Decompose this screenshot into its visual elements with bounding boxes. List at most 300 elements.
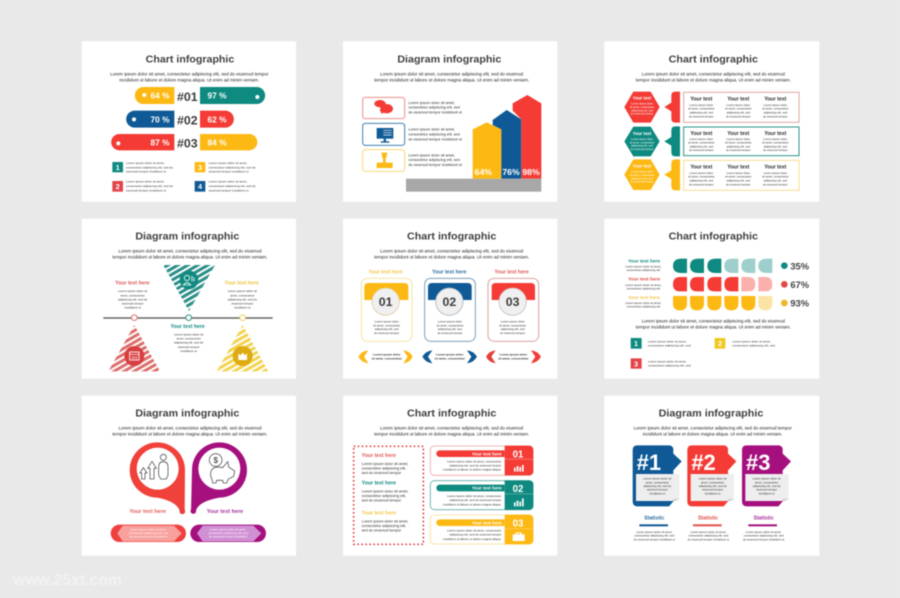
list item red [362,453,408,475]
title: Diagram infographic [659,409,764,420]
red pill [111,525,186,542]
list item yellow: sed do eiusmod tempor [362,529,402,533]
legend 1: consectetur adipiscing elit, sed. [648,343,692,347]
hexagon red: Your text [633,96,652,101]
legend 3: Lorem ipsum dolor sit amet, [648,360,687,364]
card 03: adipiscing elit, sed [501,327,525,331]
table yellow: adipiscing elit, sed [690,178,713,182]
table red: do eiusmod tempor [726,114,751,118]
label teal: amet, consectetur [177,337,201,341]
hexagon red: sit amet, consectetur [630,105,654,109]
table teal: Lorem ipsum dolor [726,137,750,141]
table red: adipiscing elit, sed [690,110,713,114]
label red: eiusmod tempor [122,301,144,305]
slide 6: pictogram percentages [604,219,819,379]
slide 4: striped triangles timeline [82,219,296,379]
legend 1: consectetur adipiscing elit, sed do [126,165,173,169]
intro text: incididunt ut labore et dolore magna aliqua. Ut enim ad minim veniam. [119,77,259,82]
teal row 35% [673,259,810,273]
legend 3: Lorem ipsum dolor sit amet, [209,161,247,165]
purple pin with piggy bank icon: $ [213,456,218,465]
legend 3: consectetur adipiscing elit, sed. [648,364,692,368]
legend 2 [715,338,776,349]
statistic 1: do eiusmod tempor incididunt ut [634,537,675,541]
hexagon teal: do eiusmod tempor [631,147,653,151]
rank 03: #03 [177,136,198,150]
table teal: adipiscing elit, sed [727,144,750,148]
pill 87% [111,134,174,150]
legend 3 [195,161,256,174]
statistic 2: Lorem ipsum dolor sit amet, [690,530,727,534]
chevrons and caption 3: sit amet, consectetur [498,357,529,361]
row label red [625,277,662,291]
teal inverted triangle with people icon [163,265,215,311]
purple pill: do eiusmod tempor incididunt [209,535,247,539]
pill 97% [200,87,265,104]
yellow row 93% [673,296,810,310]
tag 1 [633,445,682,506]
table teal: sit amet, consectetur [725,141,752,145]
legend 3 [631,358,692,369]
card 03: Lorem ipsum dolor [501,320,525,324]
list item red: Your text here [362,453,396,459]
list item yellow [362,511,408,533]
text 3: consectetur adipiscing elit, sed [408,158,460,162]
arrow bar 76%: 76% [502,167,520,177]
red pill: do eiusmod tempor incididunt [129,535,168,539]
list item teal: sed do eiusmod tempor [362,498,402,502]
row 02: incididunt ut labore et dolore magna aliqua. [443,502,501,506]
title: Chart infographic [146,54,235,65]
title: Chart infographic [669,232,758,243]
table teal: Your text [764,131,787,137]
legend 2: 2 [116,182,120,191]
row label red: Lorem ipsum dolor sit amet, [625,283,662,287]
hexagon yellow: sit amet, consectetur [630,173,654,177]
text 1: consectetur adipiscing elit, sed [408,106,460,110]
table yellow: Lorem ipsum dolor [689,171,713,175]
table teal: sit amet, consectetur [762,141,789,145]
intro text: tempor incididunt ut labore et dolore magna aliqua. Ut enim ad minim veniam. [374,254,529,259]
slide 9: statistic tags [604,396,819,556]
table teal: do eiusmod tempor [763,148,788,152]
list item teal: Lorem ipsum dolor sit amet, [362,489,408,493]
intro text: tempor incididunt ut labore et dolore magna aliqua. Ut enim ad minim veniam. [112,254,268,259]
label purple: Your text here [207,509,243,515]
list item red: sed do eiusmod tempor [362,471,402,475]
tag 3: incididunt ut [759,491,775,495]
intro text: Lorem ipsum dolor sit amet, consectetur adipiscing elit, sed do eiusmod [642,72,785,77]
purple pill: Lorem ipsum dolor sit amet, [210,527,246,531]
table teal: adipiscing elit, sed [690,144,713,148]
red row 67%: 67% [790,280,810,290]
hexagon yellow: Lorem ipsum dolor [631,170,653,174]
pill 84% [200,134,257,150]
hexagon yellow [624,159,660,190]
table yellow: Lorem ipsum dolor [726,171,750,175]
tag 2 [687,445,736,506]
red pill: consectetur adipiscing elit, sed [128,531,169,535]
tag 2: incididunt ut [705,491,721,495]
bracket yellow [664,159,680,190]
chevrons and caption 1: sit amet, consectetur [371,357,403,361]
chevrons and caption 2 [422,350,477,363]
label teal: incididunt ut [181,349,197,353]
hexagon yellow: Your text [633,164,652,169]
intro text: Lorem ipsum dolor sit amet, consectetur adipiscing elit, sed do eiusmod [380,72,524,77]
table red: do eiusmod tempor [689,114,714,118]
card 02: do eiusmod tempor [437,331,463,335]
table yellow: do eiusmod tempor [726,182,751,186]
card 02: 02 [442,295,456,309]
card 01: 01 [379,295,393,309]
title: Chart infographic [669,54,758,65]
yellow row 93%: 93% [790,299,810,309]
legend 4: eiusmod tempor incididunt ut [209,188,249,192]
intro text: tempor incididunt ut labore et dolore magna aliqua. Ut enim ad minim veniam. [374,77,529,82]
legend 2: eiusmod tempor incididunt ut [126,188,166,192]
row label yellow: consectetur adipiscing elit [627,305,660,309]
intro text: incididunt ut labore et dolore magna aliqua. Ut enim ad minim veniam. [643,431,783,436]
legend 1: Lorem ipsum dolor sit amet, [126,161,165,165]
row 01: Your text here [472,451,502,456]
tag 3: eiusmod tempor [756,488,777,492]
tag 2: #2 [691,450,716,475]
base bar [406,179,541,192]
text 2: Lorem ipsum dolor sit amet, [408,128,455,132]
tag 2: Lorem ipsum dolor sit [699,477,727,481]
label teal: adipiscing elit, sed do [174,341,204,345]
red pin with growth icon [130,442,185,514]
tag 1: #1 [637,450,661,475]
row 01: incididunt ut labore et dolore magna aliqua. [443,468,501,472]
list item teal [362,481,408,502]
legend 1: Lorem ipsum dolor sit amet, [648,339,687,343]
title: Diagram infographic [397,54,502,65]
card 02: Your text here [432,269,467,275]
card 01 [361,269,412,341]
arrow bar 76% [493,110,521,179]
row label teal: Your text here [628,258,660,264]
list item yellow: Lorem ipsum dolor sit amet, [362,520,408,524]
slide 7: map pins [82,396,296,556]
pill 97%: 97 % [208,91,227,101]
statistic 3: Lorem ipsum dolor sit amet, [746,530,782,534]
table yellow: do eiusmod tempor [689,182,714,186]
legend 1: 1 [634,339,638,348]
rank 01: #01 [177,90,198,104]
bracket red [664,92,680,123]
legend 2: consectetur adipiscing elit, sed. [732,343,776,347]
legend 1 [631,338,692,349]
intro text: tempor incididunt ut labore et dolore magna aliqua. Ut enim ad minim veniam. [112,431,268,436]
table yellow: adipiscing elit, sed [727,178,750,182]
card 01: do eiusmod tempor [374,331,399,335]
label teal: eiusmod tempor [178,345,200,349]
table teal: Your text [727,131,750,137]
statistic 2: consectetur adipiscing elit, sed [688,534,729,538]
arrow bar 64%: 64% [475,167,492,177]
statistic 1: consectetur adipiscing elit, sed [634,534,675,538]
statistic 3: Statistic [754,515,774,521]
card 03: do eiusmod tempor [500,331,525,335]
label yellow: amet, consectetur [230,293,254,297]
table red: Lorem ipsum dolor [763,103,787,107]
purple pin with piggy bank icon [190,442,247,514]
row 03: 03 [513,519,524,530]
row label yellow [625,295,662,309]
list item teal: consectetur adipiscing elit, [362,494,406,498]
statistic 3 [743,515,785,541]
statistic 2: Statistic [698,515,718,521]
list item teal: Your text here [362,481,396,487]
body text: tempor incididunt ut labore et dolore magna aliqua. Ut enim ad minim veniam. [636,324,791,329]
row 01: adipiscing elit, sed do eiusmod tempor [450,463,501,467]
statistic 2: do eiusmod tempor incididunt ut [688,537,729,541]
hexagon teal: Your text [633,131,652,136]
intro text: tempor incididunt ut labore et dolore magna aliqua. Ut enim ad minim veniam. [636,77,791,82]
slide 1: chart with pills [82,41,296,202]
intro text: Lorem ipsum dolor sit amet, consectetur adipiscing elit, sed do eiusmod tempor [633,426,792,431]
legend 2 [112,180,173,192]
list item red: Lorem ipsum dolor sit amet, [362,462,408,466]
row 03: Your text here [472,520,502,525]
card 03 [488,269,539,341]
table teal: Lorem ipsum dolor [689,137,713,141]
watermark: www.25xt.com [12,572,122,589]
row label teal [625,258,662,272]
slide 3: hexagons and tables [604,41,819,202]
label red: Lorem ipsum dolor sit [118,289,147,293]
title: Diagram infographic [135,409,240,420]
tag 2: eiusmod tempor [702,488,723,492]
purple pill: consectetur adipiscing elit, sed [208,531,248,535]
table red: adipiscing elit, sed [727,110,750,114]
label red: amet, consectetur [121,293,145,297]
tag 1: adipiscing elit, sed do [643,484,672,488]
tag 3: adipiscing elit, sed do [753,484,781,488]
tag 3: amet, consectetur [755,480,778,484]
yellow triangle with chart icon [217,325,268,371]
text 1: Lorem ipsum dolor sit amet, [408,101,455,105]
table teal: adipiscing elit, sed [764,144,787,148]
row 01 [430,446,533,475]
legend 2: 2 [718,339,722,348]
rank 02: #02 [177,113,198,127]
legend 3: consectetur adipiscing elit, sed do [209,165,256,169]
slide 8: dotted list and rows [343,396,557,556]
row 02: Lorem ipsum dolor sit amet, consectetur [447,494,501,498]
list item red: consectetur adipiscing elit, [362,466,406,470]
table teal: do eiusmod tempor [689,148,714,152]
intro text: Lorem ipsum dolor sit amet, consectetur adipiscing elit, sed do eiusmod [118,426,262,431]
label red: Your text here [115,280,150,286]
table red: adipiscing elit, sed [764,110,787,114]
hexagon yellow: adipiscing elit, sed [631,176,653,180]
label red: adipiscing elit, sed do [118,297,148,301]
table red [684,92,799,122]
pill 87%: 87 % [151,138,170,148]
table red: sit amet, consectetur [725,107,752,111]
table yellow: sit amet, consectetur [725,175,752,179]
chevrons and caption 3: Lorem ipsum dolor [500,353,528,357]
red triangle with calendar icon [108,325,160,371]
intro text: Lorem ipsum dolor sit amet, consectetur adipiscing elit, sed do eiusmod [380,426,524,431]
intro text: tempor incididunt ut labore et dolore magna aliqua. Ut enim ad minim veniam. [374,431,529,436]
card 01: sit amet, consectetur [373,323,400,327]
tag 1: eiusmod tempor [647,488,668,492]
body text: Lorem ipsum dolor sit amet, consectetur adipiscing elit, sed do eiusmod [642,319,785,324]
tag 2: adipiscing elit, sed do [699,484,727,488]
chevrons and caption 1: Lorem ipsum dolor [373,353,401,357]
card 02 [425,269,475,341]
card 02: adipiscing elit, sed [438,327,462,331]
statistic 1: Lorem ipsum dolor sit amet, [636,530,673,534]
statistic 3: consectetur adipiscing elit, sed [744,534,784,538]
row label yellow: Your text here [628,295,660,301]
tag 3: #3 [746,450,770,475]
title: Chart infographic [407,409,497,420]
intro text: Lorem ipsum dolor sit amet, consectetur adipiscing elit, sed do eiusmod tempor [110,72,269,77]
legend 1: 1 [116,163,120,172]
title: Diagram infographic [135,232,240,243]
legend 2: Lorem ipsum dolor sit amet, [732,339,771,343]
text 1: do eiusmod tempor incididunt ut [408,111,463,115]
table yellow [684,160,799,190]
row 02: Your text here [472,486,502,491]
row label yellow: Lorem ipsum dolor sit amet, [625,301,662,305]
row 01: 01 [513,449,524,460]
card 01: Your text here [369,269,403,275]
pill 70% [126,111,174,128]
legend 3: 3 [198,163,202,172]
row 02: 02 [513,484,523,495]
table yellow: Your text [690,165,713,171]
pill 64%: 64 % [151,91,170,101]
table red: sit amet, consectetur [688,107,715,111]
table teal [684,127,799,156]
label yellow: adipiscing elit, sed do [228,297,257,301]
label yellow: Lorem ipsum dolor sit [228,289,257,293]
pill 62% [200,111,234,128]
statistic 1 [634,515,675,541]
legend 3: 3 [634,359,638,368]
red row 67% [673,277,810,291]
label yellow: Your text here [225,280,259,286]
legend 4: Lorem ipsum dolor sit amet, [209,180,247,184]
pill 64% [135,87,174,104]
legend 4: 4 [198,182,203,191]
table yellow: Your text [764,165,787,171]
row label teal: Lorem ipsum dolor sit amet, [625,264,662,268]
table red: Your text [764,97,787,103]
row label red: Your text here [628,277,660,283]
row 03: Lorem ipsum dolor sit amet, consectetur [447,529,501,533]
title: Chart infographic [407,232,497,243]
teal row 35%: 35% [790,261,810,271]
label yellow: incididunt ut [234,305,251,309]
table red: Your text [727,97,750,103]
card 02: sit amet, consectetur [437,323,463,327]
list item yellow: consectetur adipiscing elit, [362,524,406,528]
box: screen icon [363,123,405,145]
label red [115,280,150,309]
hexagon teal: sit amet, consectetur [630,140,654,144]
card 02: Lorem ipsum dolor [438,320,462,324]
table yellow: sit amet, consectetur [688,175,715,179]
row 03 [430,515,533,544]
card 01: adipiscing elit, sed [375,327,399,331]
hexagon yellow: do eiusmod tempor [631,180,653,184]
row 03: adipiscing elit, sed do eiusmod tempor [450,533,501,537]
purple pill [190,525,266,542]
chevrons and caption 3 [486,350,541,363]
table yellow: do eiusmod tempor [763,182,788,186]
statistic 1: Statistic [644,515,664,521]
slide 2: arrow bars [343,41,557,202]
tag 1: Lorem ipsum dolor sit [643,477,671,481]
hexagon red: adipiscing elit, sed [631,108,653,112]
arrow bar 98%: 98% [522,167,540,177]
chevrons and caption 1 [358,350,413,363]
intro text: Lorem ipsum dolor sit amet, consectetur adipiscing elit, sed do eiusmod [118,249,262,254]
table red: sit amet, consectetur [762,107,789,111]
arrow bar 64% [473,122,501,179]
row 02 [430,480,533,510]
card 03: 03 [506,295,520,309]
tag 3: Lorem ipsum dolor sit [753,477,781,481]
legend 4 [195,180,256,192]
legend 1: eiusmod tempor incididunt ut [126,170,166,174]
table yellow: Lorem ipsum dolor [763,171,787,175]
table yellow: Your text [727,165,750,171]
label red: Your text here [129,509,166,515]
hexagon teal: Lorem ipsum dolor [631,137,653,141]
row 03: incididunt ut labore et dolore magna aliqua. [443,537,501,541]
tag 3 [742,445,791,506]
card 01: Lorem ipsum dolor [375,320,399,324]
hexagon red: Lorem ipsum dolor [631,102,653,106]
label yellow [225,280,259,309]
text 2: do eiusmod tempor incididunt ut [408,137,463,141]
statistic 3: do eiusmod tempor incididunt ut [743,537,785,541]
hexagon red: do eiusmod tempor [631,112,653,116]
hexagon teal: adipiscing elit, sed [631,144,653,148]
table red: do eiusmod tempor [763,114,788,118]
chevrons and caption 2: sit amet, consectetur [434,357,466,361]
tag 1: amet, consectetur [646,480,669,484]
legend 2: consectetur adipiscing elit, sed do [126,184,173,188]
red pill: Lorem ipsum dolor sit amet, [130,527,167,531]
arrow bar 98% [513,95,541,179]
text 3: do eiusmod tempor incididunt ut [408,163,463,167]
table yellow: sit amet, consectetur [762,175,789,179]
text 3: Lorem ipsum dolor sit amet, [408,153,455,157]
chevrons and caption 2: Lorem ipsum dolor [436,353,464,357]
table teal: Lorem ipsum dolor [763,137,787,141]
label teal: Your text here [171,324,205,330]
timeline [103,315,273,320]
hexagon red [624,92,660,123]
bracket teal [664,126,680,156]
row label teal: consectetur adipiscing elit [627,268,660,272]
card 03: Your text here [495,269,529,275]
table red: Your text [690,97,713,103]
card 03: sit amet, consectetur [499,323,526,327]
pill 62%: 62 % [208,114,227,124]
table teal: Your text [690,131,713,137]
legend 2: Lorem ipsum dolor sit amet, [126,180,165,184]
